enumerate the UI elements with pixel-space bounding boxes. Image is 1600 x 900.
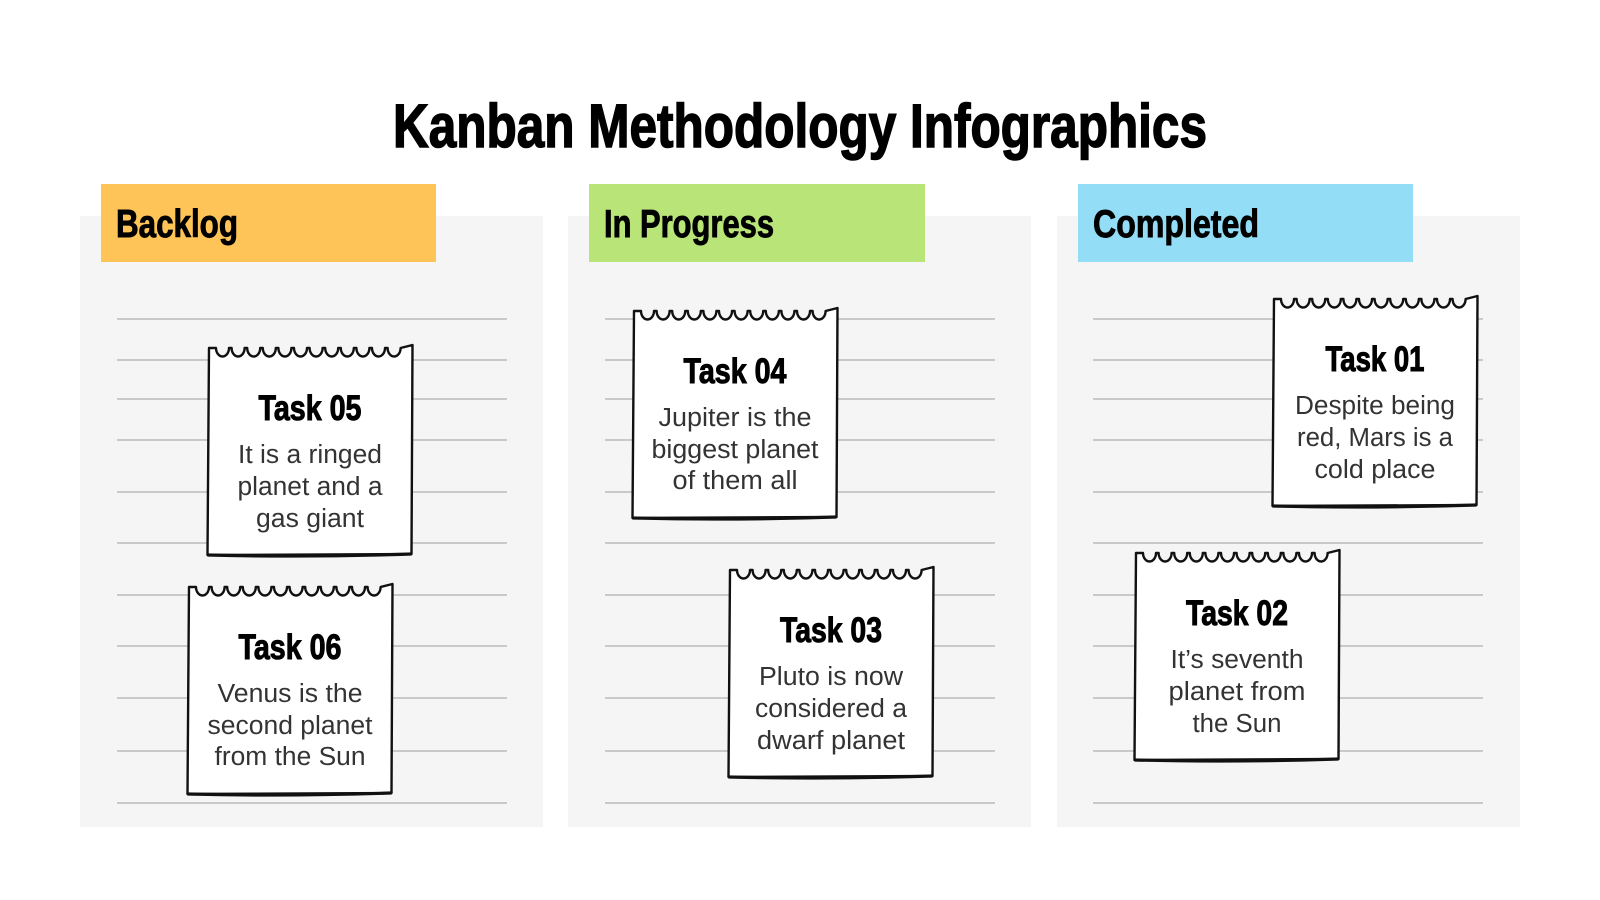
tab: completed: Completed: [1093, 203, 1259, 246]
note: task 04: of them all: [672, 467, 798, 495]
note: task 06: [188, 584, 392, 795]
tab: in progress: In Progress: [604, 203, 774, 246]
note: task 05: [208, 345, 412, 556]
note: task 06: Task 06: [238, 628, 342, 667]
note: task 01: cold place: [1314, 456, 1436, 484]
note: task 02: planet from: [1168, 678, 1306, 706]
note: task 05: planet and a: [238, 473, 383, 501]
note: task 03: dwarf planet: [757, 727, 905, 755]
note: task 03: considered a: [755, 695, 908, 723]
title: Kanban Methodology Infographics: [393, 92, 1207, 160]
note: task 02: [1134, 550, 1340, 761]
tab: in progress: [589, 184, 925, 262]
note: task 04: Task 04: [684, 352, 787, 391]
note: task 01: red, Mars is a: [1297, 424, 1454, 452]
note: task 05: Task 05: [258, 389, 362, 428]
note: task 02: It’s seventh: [1170, 646, 1304, 674]
note: task 03: [728, 567, 934, 778]
panel: backlog: [80, 184, 543, 827]
note: task 04: Jupiter is the: [658, 404, 812, 432]
note: task 03: Pluto is now: [759, 663, 904, 691]
note: task 01: [1272, 296, 1478, 507]
note: task 02: the Sun: [1192, 710, 1282, 738]
note: task 01: Task 01: [1326, 340, 1424, 379]
tab: backlog: Backlog: [116, 203, 238, 246]
tab: completed: [1078, 184, 1413, 262]
note: task 06: from the Sun: [214, 743, 366, 771]
note: task 03: Task 03: [780, 611, 882, 650]
panel: completed: [1057, 184, 1520, 827]
note: task 06: Venus is the: [218, 680, 362, 708]
note: task 05: gas giant: [256, 505, 364, 533]
note: task 05: It is a ringed: [238, 441, 382, 469]
note: task 02: Task 02: [1186, 594, 1288, 633]
note: task 04: biggest planet: [652, 436, 819, 464]
note: task 04: [632, 308, 838, 519]
panel: in progress: [568, 184, 1031, 827]
note: task 01: Despite being: [1295, 392, 1455, 420]
note: task 06: second planet: [208, 712, 372, 740]
tab: backlog: [101, 184, 436, 262]
